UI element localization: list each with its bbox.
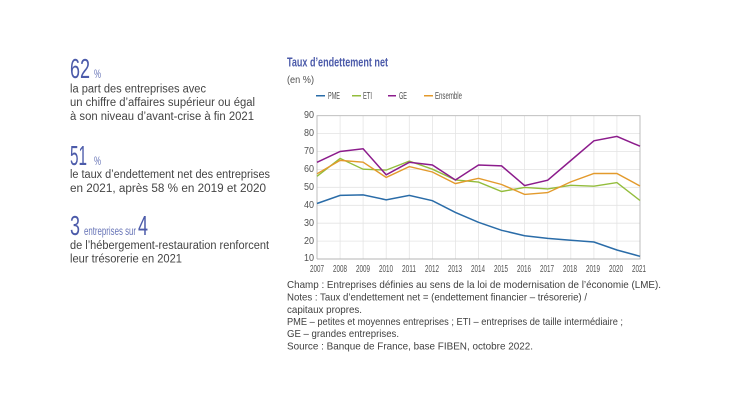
y axis labels: 80	[304, 128, 314, 139]
key figure: 3 entreprises sur 4: leur trésorerie en 2021	[70, 254, 182, 266]
key figure: 3 entreprises sur 4: de l’hébergement-restauration renforcent	[70, 240, 270, 252]
notes and source: GE – grandes entreprises.	[287, 328, 399, 340]
key figure: 51 %: 51	[70, 140, 87, 171]
x axis labels	[310, 264, 646, 275]
x axis labels: 2014	[471, 264, 485, 275]
key figure: 3 entreprises sur 4: 3	[70, 210, 80, 241]
y axis labels: 60	[304, 164, 314, 175]
x axis labels: 2011	[402, 264, 416, 275]
legend: PME	[328, 91, 340, 102]
x axis labels: 2021	[632, 264, 646, 275]
key figure: 62 %	[70, 53, 255, 123]
key figure: 51 %: %	[94, 154, 101, 168]
x axis labels: 2010	[379, 264, 393, 275]
line chart	[304, 110, 646, 275]
y axis labels: 20	[304, 236, 314, 247]
notes and source	[287, 279, 661, 352]
x axis labels: 2019	[586, 264, 600, 275]
x axis labels: 2017	[540, 264, 554, 275]
legend: GE	[399, 91, 407, 102]
x axis labels: 2020	[609, 264, 623, 275]
key figure: 62 %: un chiffre d’affaires supérieur ou égal	[70, 97, 255, 109]
y axis labels: 10	[304, 253, 314, 264]
unit label: (en %)	[287, 75, 314, 86]
x axis labels: 2008	[333, 264, 347, 275]
chart title: Taux d’endettement net	[287, 54, 388, 70]
key figure: 51 %: en 2021, après 58 % en 2019 et 2020	[70, 183, 266, 195]
key figure: 62 %: à son niveau d’avant-crise à fin 2021	[70, 111, 254, 123]
notes and source: PME – petites et moyennes entreprises ; ETI – entreprises de taille intermédiaire ;	[287, 316, 623, 328]
x axis labels: 2013	[448, 264, 462, 275]
notes and source: Notes : Taux d’endettement net = (endettement financier – trésorerie) /	[287, 292, 587, 304]
y axis labels: 40	[304, 200, 314, 211]
key figure: 3 entreprises sur 4: entreprises sur	[84, 224, 136, 238]
legend: ETI	[363, 91, 372, 102]
x axis labels: 2016	[517, 264, 531, 275]
key figure: 51 %	[70, 140, 270, 195]
key figure: 51 %: le taux d’endettement net des entreprises	[70, 169, 270, 181]
key figure: 62 %: la part des entreprises avec	[70, 84, 206, 96]
notes and source: capitaux propres.	[287, 304, 362, 316]
key figure: 62 %: %	[94, 67, 101, 81]
series: PME	[317, 195, 640, 256]
key figure: 3 entreprises sur 4	[70, 210, 270, 266]
legend	[316, 91, 462, 102]
x axis labels: 2015	[494, 264, 508, 275]
notes and source: Source : Banque de France, base FIBEN, octobre 2022.	[287, 340, 533, 352]
key figure: 62 %: 62	[70, 53, 90, 84]
x axis labels: 2018	[563, 264, 577, 275]
notes and source: Champ : Entreprises définies au sens de la loi de modernisation de l’économie (LME).	[287, 279, 661, 291]
x axis labels: 2007	[310, 264, 324, 275]
y axis labels: 50	[304, 182, 314, 193]
y axis labels: 30	[304, 218, 314, 229]
series: Ensemble	[317, 160, 640, 194]
series: ETI	[317, 158, 640, 200]
y axis labels	[304, 110, 314, 264]
legend: Ensemble	[435, 91, 462, 102]
x axis labels: 2009	[356, 264, 370, 275]
series: GE	[317, 136, 640, 186]
key figure: 3 entreprises sur 4: 4	[138, 210, 148, 241]
y axis labels: 90	[304, 110, 314, 121]
y axis labels: 70	[304, 146, 314, 157]
x axis labels: 2012	[425, 264, 439, 275]
